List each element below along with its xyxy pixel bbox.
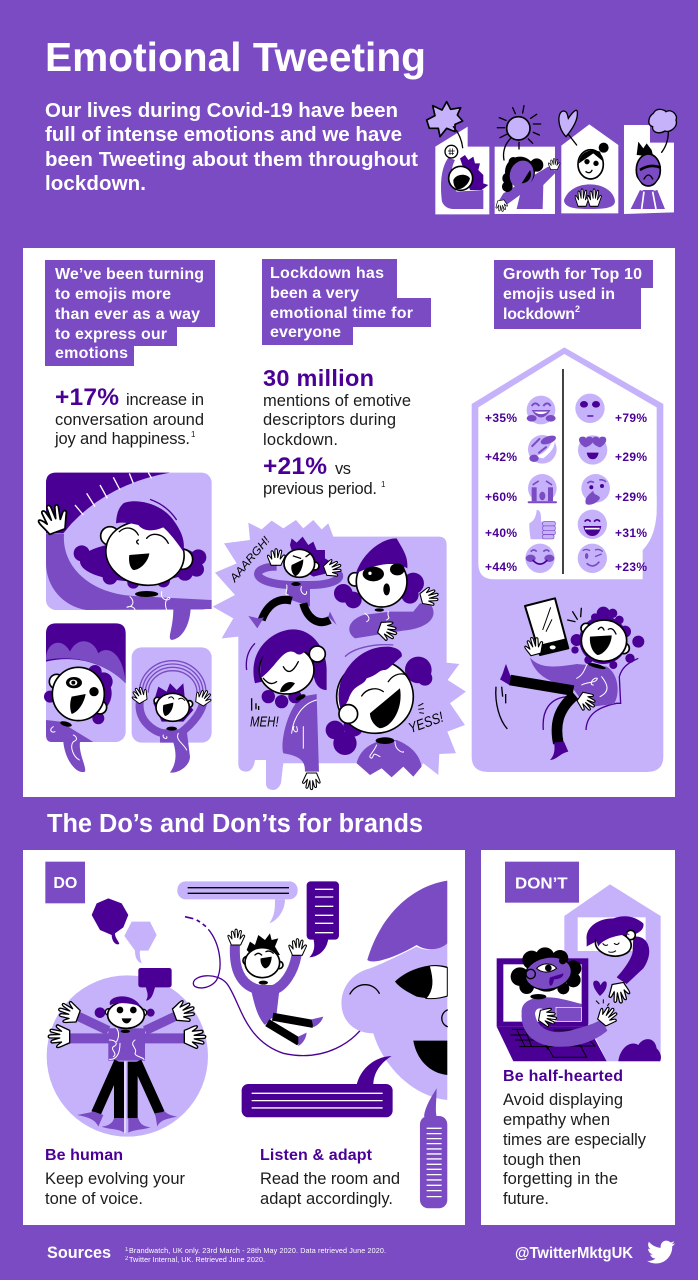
house 3: loving [559,110,618,213]
heading box: emojis: emotions [55,345,128,362]
big listening face [341,881,447,1100]
house: emoji chart with laughing figure [472,347,663,772]
house [564,884,661,1061]
speech bubble: wide dark [242,1056,393,1117]
heading box: lockdown: Lockdown has [270,265,384,282]
emotions burst background [213,520,466,790]
sources: 1 [125,1247,129,1253]
text: be half-hearted: times are especially [503,1131,647,1149]
bush [618,1039,661,1061]
text: be half-hearted: Avoid displaying [503,1091,623,1109]
intro text: been Tweeting about them throughout [45,148,418,171]
text: be human: Keep evolving your [45,1170,186,1188]
house 2: joyful [495,106,560,214]
emoji growth labels: +35% [485,411,517,425]
don't badge: DON’T [515,876,568,893]
emoji: rolling laughing [528,434,557,464]
title: Emotional Tweeting [45,34,426,80]
stat: +21% [263,453,386,498]
character illustrations: joy panels and emotions [34,473,466,790]
panel: don't [481,850,675,1225]
heading box: emojis: We’ve been turning [55,266,204,283]
text: listen and adapt: adapt accordingly. [260,1190,393,1208]
intro text: Our lives during Covid-19 have been [45,99,398,122]
emoji: heart eyes [578,435,607,465]
figure: surprised [334,538,441,643]
text: be half-hearted: Be half-hearted [503,1068,623,1085]
sources [47,1243,386,1264]
emoji: eye roll [575,394,605,423]
header illustration: four emotional houses [427,102,676,214]
heading box: lockdown [262,259,431,345]
text: be half-hearted: tough then [503,1151,581,1169]
figure: laughing at tablet [496,598,644,760]
do badge: DO [53,875,77,892]
friend leaning from window [586,916,649,1005]
text: be half-hearted [503,1068,647,1208]
emoji growth labels: +31% [615,526,647,540]
house 4: sad [624,109,676,214]
heading box: growth: Growth for Top 10 [503,266,642,283]
stat: +17%: +17% [55,384,119,411]
arrow: swirl line [185,917,379,1056]
figure: yess [326,645,446,777]
text: be human: Be human [45,1147,123,1164]
heading box: emojis: than ever as a way [55,306,200,323]
figure: jumping [228,929,323,1046]
emoji: crying [528,474,557,503]
stat: 30 million [263,365,411,449]
text: be human [45,1147,186,1208]
figure: aaargh: AAARGH! [227,534,273,585]
emoji: thinking [581,474,610,505]
figure: aaargh [227,534,344,628]
don't illustration [497,862,661,1061]
house 1: angry [427,102,489,214]
stat: 30 million: lockdown. [263,431,338,449]
laptop [497,958,607,1061]
panel: do [23,850,465,1225]
figure: be human [47,968,208,1137]
heading box: growth: 2 [575,304,580,314]
heading box: emojis [45,260,215,366]
stat: +21%: 1 [381,480,386,489]
emoji growth labels: +79% [615,411,647,425]
stat: 30 million: 30 million [263,365,374,391]
emoji growth labels [485,411,647,574]
heading box: growth: emojis used in [503,286,615,303]
panel: lower left face [44,623,126,772]
stat: 30 million: mentions of emotive [263,392,411,410]
emoji: thumbs up [529,510,555,539]
stat: +17%: conversation around [55,411,204,429]
sources: Brandwatch, UK only. 23rd March - 28th May 2020. Data retrieved June 2020. [129,1246,386,1255]
emoji: tears of joy [527,396,556,424]
emoji: wink [578,544,607,573]
emoji: grin [578,510,607,539]
speech bubble: column [307,881,339,957]
text: be half-hearted: empathy when [503,1111,610,1129]
panel: big laughing face [34,473,212,640]
sources: Sources [47,1243,111,1262]
text: be half-hearted: forgetting in the [503,1170,618,1188]
section heading: The Do’s and Don’ts for brands [47,810,423,838]
heading box: growth [494,260,653,329]
text: listen and adapt: Listen & adapt [260,1147,373,1164]
stat: 30 million: descriptors during [263,411,396,429]
do illustrations [45,862,447,1208]
figure: yess: YESS! [407,710,446,737]
person at laptop [511,947,621,1047]
heading box: lockdown: everyone [270,324,341,341]
text: be human: tone of voice. [45,1190,143,1208]
heading box: growth: lockdown [503,306,575,323]
emoji growth labels: +60% [485,490,517,504]
stat: +17%: joy and happiness. [54,430,190,448]
text: listen and adapt [260,1147,400,1208]
figure: meh [246,629,327,790]
stat: +17%: increase in [126,391,204,409]
text: be half-hearted: future. [503,1190,549,1208]
do badge [45,862,85,903]
emoji growth labels: +23% [615,560,647,574]
panel: rainbow face [129,647,214,773]
stat: +17% [54,384,204,448]
panel: main white panel [23,248,675,797]
sources: 2 [125,1256,129,1262]
intro text: full of intense emotions and we have [45,123,402,146]
emoji growth labels: +44% [485,560,517,574]
heading box: lockdown: emotional time for [270,305,413,322]
stat: +17%: 1 [191,430,196,439]
don't badge [505,862,579,903]
emoji growth labels: +29% [615,450,647,464]
speech bubbles: left [92,898,157,963]
figure: meh: MEH! [250,715,279,731]
stat: +21%: +21% [263,453,327,480]
intro text: lockdown. [45,172,146,195]
emoji growth labels: +40% [485,526,517,540]
twitter handle: @TwitterMktgUK [515,1245,634,1262]
heading box: emojis: to express our [55,326,167,343]
icon: twitter bird [647,1241,675,1263]
intro text [45,99,418,195]
emoji growth labels: +29% [615,490,647,504]
stat: +21%: vs [335,460,351,478]
heading box: emojis: to emojis more [55,286,171,303]
emoji: blushing smile [525,544,555,573]
emoji growth labels: +42% [485,450,517,464]
stat: +21%: previous period. [263,480,377,498]
speech bubble: tall [420,1088,447,1208]
speech bubble: top [177,881,298,923]
sources: Twitter Internal, UK. Retrieved June 2020. [129,1255,265,1264]
heading box: lockdown: been a very [270,285,359,302]
text: listen and adapt: Read the room and [260,1170,400,1188]
